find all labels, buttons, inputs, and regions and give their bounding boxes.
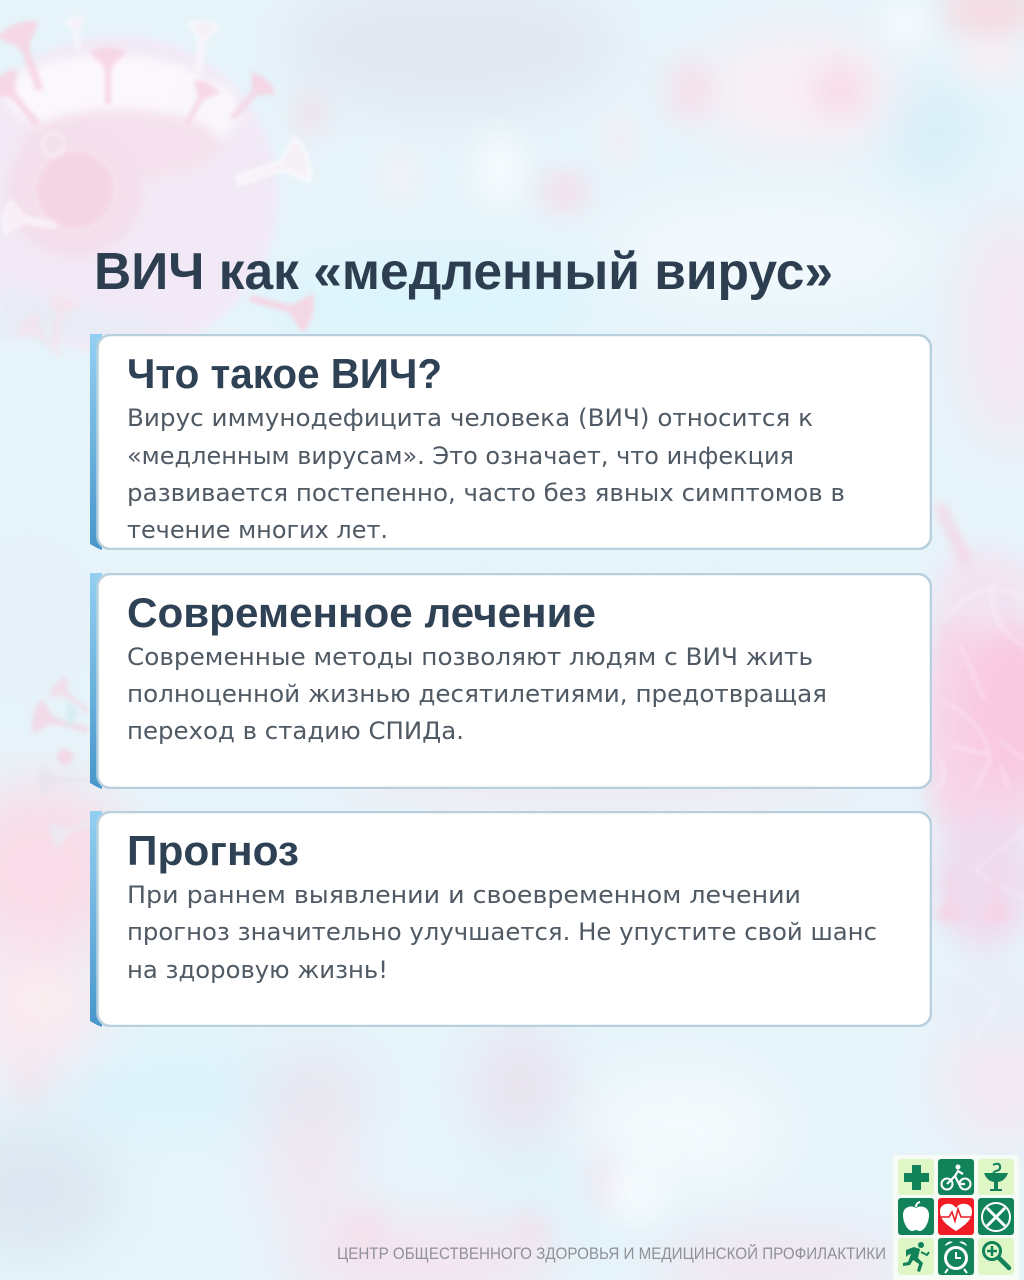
panel: современное лечение: Современные методы позволяют людям с ВИЧ жить <box>127 643 813 671</box>
panel: прогноз: Прогноз <box>127 827 299 874</box>
panel: что такое ВИЧ: «медленным вирусам». Это означает, что инфекция <box>127 442 794 470</box>
panel: что такое ВИЧ: развивается постепенно, часто без явных симптомов в <box>127 479 845 507</box>
panel: что такое ВИЧ <box>90 334 932 550</box>
icon: no smoking <box>978 1198 1014 1235</box>
icon: runner <box>898 1238 934 1275</box>
icon: cross <box>898 1159 934 1195</box>
footer organisation name: ЦЕНТР ОБЩЕСТВЕННОГО ЗДОРОВЬЯ И МЕДИЦИНСКОЙ ПРОФИЛАКТИКИ <box>337 1244 886 1263</box>
panel: прогноз <box>90 811 932 1027</box>
logo: nine health icons <box>893 1155 1019 1280</box>
panel: прогноз: на здоровую жизнь! <box>127 956 388 984</box>
icon: alarm clock <box>938 1238 974 1275</box>
panel: современное лечение: полноценной жизнью десятилетиями, предотвращая <box>127 680 827 708</box>
virus right <box>923 503 1024 1040</box>
panel: современное лечение <box>90 573 932 789</box>
icon: heart with pulse <box>938 1198 974 1235</box>
icon: apple <box>898 1198 934 1235</box>
virus top-left <box>0 16 318 355</box>
panel: что такое ВИЧ: Вирус иммунодефицита человека (ВИЧ) относится к <box>127 404 813 432</box>
panel: прогноз: При раннем выявлении и своевременном лечении <box>127 881 801 909</box>
panel: современное лечение: Современное лечение <box>127 589 596 636</box>
panel: прогноз: прогноз значительно улучшается. Не упустите свой шанс <box>127 918 877 946</box>
icon: magnifier with plus <box>978 1238 1014 1275</box>
icon: bowl of hygieia <box>978 1159 1014 1195</box>
panel: что такое ВИЧ: Что такое ВИЧ? <box>127 350 442 397</box>
panel: современное лечение: переход в стадию СПИДа. <box>127 717 464 745</box>
title: ВИЧ как «медленный вирус» <box>94 243 833 301</box>
panel: что такое ВИЧ: течение многих лет. <box>127 516 388 544</box>
virus left-middle fragment <box>29 674 97 850</box>
icon: bicycle <box>938 1159 974 1195</box>
